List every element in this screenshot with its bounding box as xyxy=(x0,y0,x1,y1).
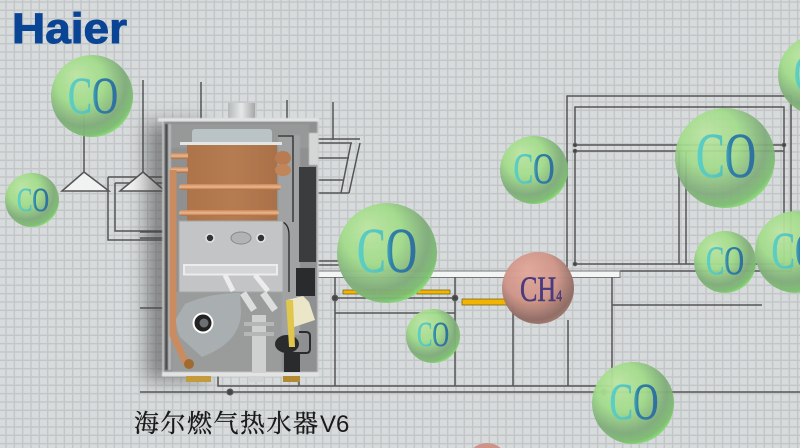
caption: V6 xyxy=(320,411,349,438)
molecule: CO centre large xyxy=(337,203,437,303)
molecule: CO bottom xyxy=(592,362,674,444)
molecule: CO right large: CO xyxy=(696,120,756,191)
molecule: CH4 bottom, cropped xyxy=(473,443,501,448)
molecule: CO right edge xyxy=(755,211,800,293)
molecule: CO left: CO xyxy=(17,182,49,219)
molecule: CH4 xyxy=(502,252,574,324)
gas valve xyxy=(244,315,274,373)
molecule: CO right small: CO xyxy=(706,238,744,283)
molecule: CO top left: CO xyxy=(68,68,118,125)
molecule: CO right large xyxy=(675,108,775,208)
molecule: CO below counter: CO xyxy=(417,315,449,354)
molecule: CO left xyxy=(5,173,59,227)
bottom fittings xyxy=(186,376,300,382)
copper heat exchanger xyxy=(171,145,291,369)
molecule: CO bottom: CO xyxy=(610,374,658,431)
heater casing xyxy=(158,118,319,376)
heater shadow xyxy=(146,122,206,380)
molecule: CO right small xyxy=(694,231,756,293)
water heater V6 cutaway xyxy=(146,103,319,382)
line drawing: kitchen counter and cabinets xyxy=(140,271,800,395)
caption: 海尔燃气热水器 xyxy=(134,410,320,438)
hose xyxy=(277,136,293,292)
molecule: CO top right edge xyxy=(778,35,800,115)
top cover xyxy=(192,129,272,144)
molecule: CO upper middle xyxy=(500,136,568,204)
burner plate xyxy=(179,221,283,292)
logo: Haier: Haier xyxy=(12,5,127,53)
line drawing: left lamps xyxy=(62,80,333,308)
black control parts xyxy=(275,167,316,372)
molecule: CH4: CH4 xyxy=(520,269,562,309)
gas tubes xyxy=(243,293,275,310)
molecule: CO top left xyxy=(51,55,133,137)
chimney xyxy=(228,103,255,123)
blower fan xyxy=(176,293,241,357)
gas burner yellow bars xyxy=(343,290,565,305)
line drawing: range hood beside heater xyxy=(318,139,360,265)
line drawing: kitchen room frame xyxy=(567,96,791,271)
molecule: CO below counter xyxy=(406,309,460,363)
molecule: CO upper middle: CO xyxy=(514,146,554,193)
cream ignition block xyxy=(286,296,315,347)
molecule: CO centre large: CO xyxy=(357,215,417,286)
